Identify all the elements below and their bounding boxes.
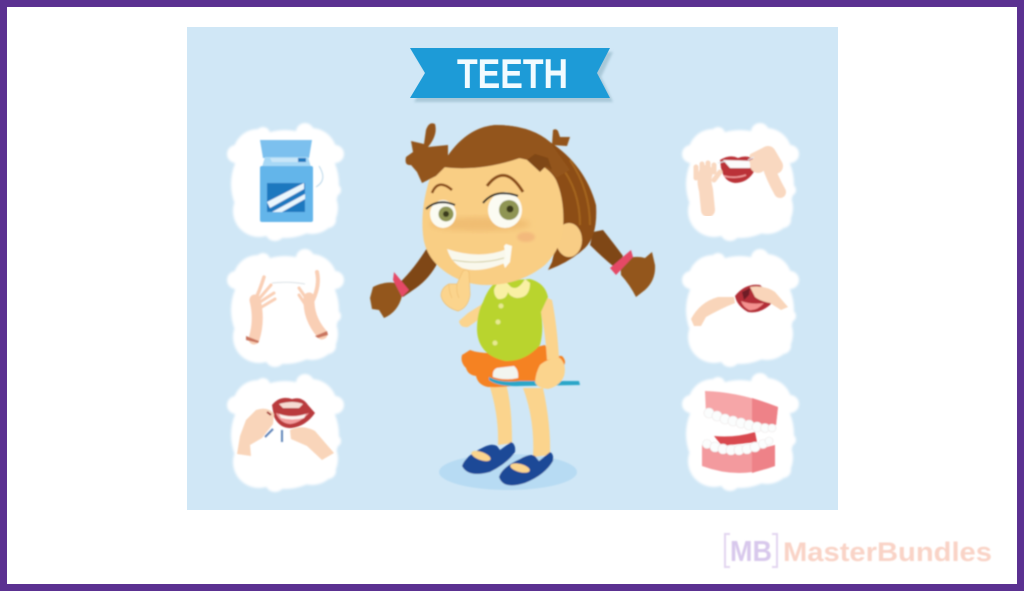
collar (494, 279, 530, 299)
hair spikes left (406, 123, 448, 183)
icon: hands flossing with mouth (696, 150, 780, 210)
shirt (477, 279, 548, 361)
upper teeth (704, 408, 776, 432)
skirt (462, 345, 565, 387)
hair strands (560, 160, 590, 225)
panel: flossing inside open mouth (682, 249, 799, 367)
title: TEETH (457, 50, 568, 97)
right shoe (499, 452, 553, 485)
icon: dentures (702, 391, 778, 473)
panel: flossing upper teeth (682, 123, 799, 241)
panel: denture model (682, 373, 799, 491)
icon: mouth, hands and arrows (237, 398, 334, 460)
right arm (538, 296, 559, 360)
icon: hands (246, 272, 328, 343)
left eye (426, 200, 456, 228)
left braid (396, 248, 438, 297)
left arm (459, 303, 488, 327)
lower teeth (702, 437, 773, 455)
buttons (492, 304, 504, 346)
right braid (590, 230, 623, 270)
left leg (489, 384, 512, 445)
blush (517, 232, 535, 242)
hand with brush (535, 358, 565, 389)
foam (503, 244, 512, 268)
right eye (483, 192, 522, 228)
logo wordmark: MasterBundles (783, 537, 992, 567)
toothbrush (489, 377, 580, 386)
banner: title (410, 48, 613, 102)
right leg (523, 388, 550, 457)
shadow under feet (439, 454, 577, 490)
icon: floss container (260, 140, 323, 222)
smile (447, 249, 507, 270)
watermark logo (725, 534, 992, 568)
face shading band (430, 217, 530, 231)
hair spikes right (552, 129, 570, 146)
character: girl with toothbrush (370, 123, 655, 490)
icon: open mouth and hands (691, 285, 788, 326)
panel: infographic background (187, 27, 838, 510)
panel: hands holding floss (227, 249, 344, 367)
ear (556, 223, 582, 257)
face (422, 157, 563, 285)
left brow (432, 185, 452, 193)
panel: flossing lower teeth (227, 374, 344, 492)
left shoe (462, 442, 515, 474)
panel: floss box (227, 123, 344, 241)
logo mark: MB (730, 536, 772, 568)
hand at mouth (441, 270, 470, 311)
hair fringe (442, 125, 570, 178)
hair back (445, 125, 596, 270)
right brow (487, 175, 523, 192)
